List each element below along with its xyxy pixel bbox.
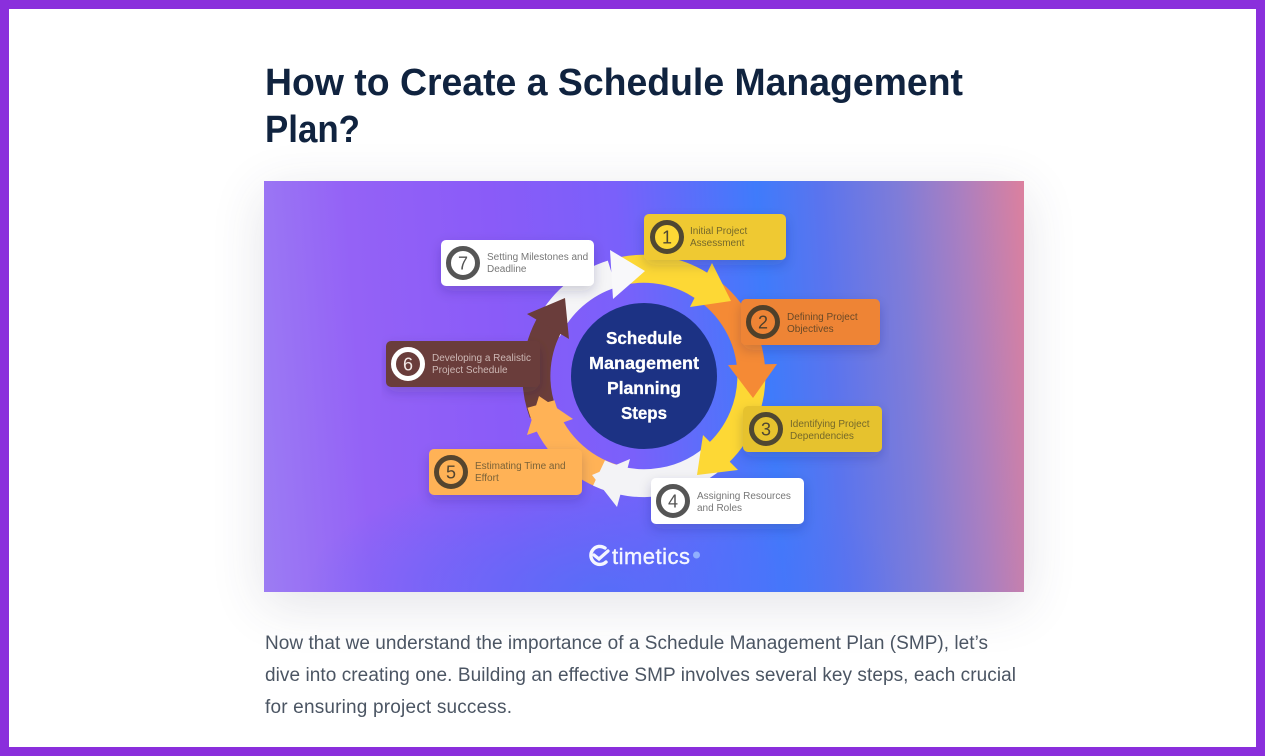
intro paragraph <box>265 633 1016 718</box>
step 6 <box>386 341 540 387</box>
step 2 <box>741 299 880 345</box>
step 5: Effort <box>475 473 499 484</box>
step 7: 7 <box>458 254 468 274</box>
step 2: Defining Project <box>787 312 858 323</box>
step 1: Assessment <box>690 238 745 249</box>
step 1: Initial Project <box>690 226 747 237</box>
step 6: 6 <box>403 354 413 374</box>
centre circle: Steps <box>621 403 667 423</box>
cycle diagram <box>386 214 882 569</box>
title: How to Create a Schedule Management <box>265 62 963 104</box>
cycle arrowheads <box>527 250 777 507</box>
intro paragraph: for ensuring project success. <box>265 697 512 718</box>
logo: timetics: timetics <box>612 544 690 569</box>
step 5 <box>429 449 582 495</box>
step 7: Setting Milestones and <box>487 252 588 263</box>
step 1 <box>644 214 786 260</box>
step 7: Deadline <box>487 264 527 275</box>
step 5: Estimating Time and <box>475 461 566 472</box>
step 6: Project Schedule <box>432 365 508 376</box>
step 3: 3 <box>761 420 771 440</box>
step 3: Identifying Project <box>790 419 870 430</box>
centre circle: Schedule <box>606 328 682 348</box>
step 3 <box>743 406 882 452</box>
step 6: Developing a Realistic <box>432 353 531 364</box>
step 4: and Roles <box>697 503 742 514</box>
centre circle: Planning <box>607 378 681 398</box>
step 2: 2 <box>758 312 768 332</box>
title: Plan? <box>265 109 360 151</box>
step 4: 4 <box>668 492 678 512</box>
intro paragraph: dive into creating one. Building an effective SMP involves several key steps, each crucial <box>265 665 1016 686</box>
hero image background <box>264 181 1024 592</box>
step 4 <box>651 478 804 524</box>
centre circle: Management <box>589 353 699 373</box>
step 5: 5 <box>446 462 456 482</box>
intro paragraph: Now that we understand the importance of a Schedule Management Plan (SMP), let’s <box>265 633 988 654</box>
step 1: 1 <box>662 228 672 248</box>
step 4: Assigning Resources <box>697 491 791 502</box>
step 3: Dependencies <box>790 431 854 442</box>
centre circle <box>571 303 717 449</box>
step 7 <box>441 240 594 286</box>
title <box>265 62 963 151</box>
step 2: Objectives <box>787 324 834 335</box>
cycle ring arcs <box>536 269 751 483</box>
